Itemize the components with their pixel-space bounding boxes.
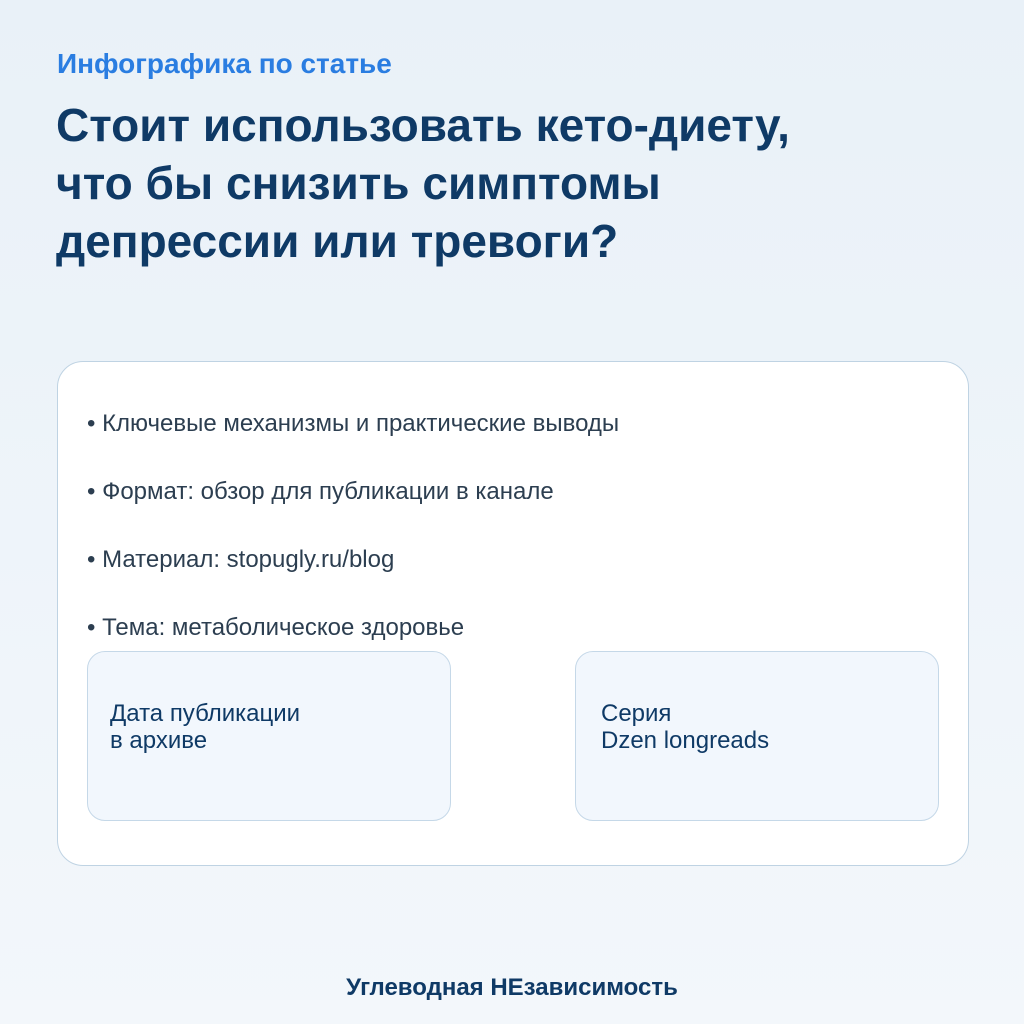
- card: series: Dzen longreads: [601, 727, 769, 754]
- card: date: Дата публикации: [110, 700, 300, 727]
- bullet list: • Формат: обзор для публикации в канале: [87, 478, 554, 505]
- footer: Углеводная НЕзависимость: [346, 974, 678, 1001]
- bullet list: • Ключевые механизмы и практические выводы: [87, 410, 619, 437]
- title: что бы снизить симптомы: [56, 157, 661, 209]
- title: депрессии или тревоги?: [56, 215, 618, 267]
- title: [56, 99, 790, 267]
- bullet list: • Материал: stopugly.ru/blog: [87, 546, 394, 573]
- subtitle: Инфографика по статье: [57, 48, 392, 79]
- card: date: [87, 651, 451, 821]
- bullet list: • Тема: метаболическое здоровье: [87, 614, 464, 641]
- card: series: [575, 651, 939, 821]
- bullet list: [87, 410, 619, 641]
- card: series: Серия: [601, 700, 671, 727]
- panel: main card: [57, 361, 969, 866]
- card: date: в архиве: [110, 727, 207, 754]
- title: Стоит использовать кето-диету,: [56, 99, 790, 151]
